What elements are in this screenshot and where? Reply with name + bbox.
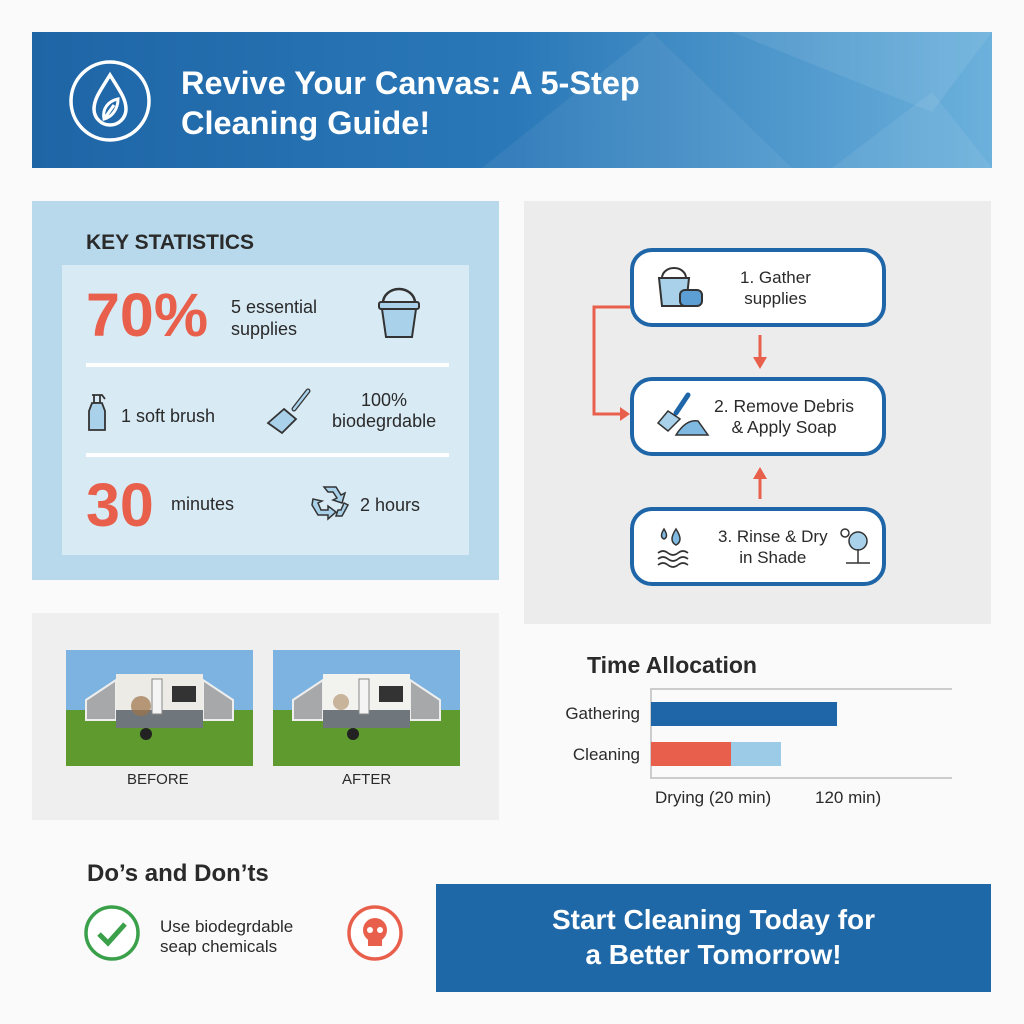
text: 2 hours: 2 hours	[360, 495, 420, 515]
watermark text: cleaningbro.com	[473, 946, 539, 956]
step 2	[630, 377, 886, 456]
text: supplies: 5 essential	[231, 297, 317, 317]
text: supplies: supplies	[231, 319, 297, 339]
text: biodegradable: biodegrdable	[332, 411, 436, 431]
step 2: & Apply Soap	[731, 417, 837, 437]
panel: before and after	[32, 613, 499, 820]
chart: time allocation: Gathering	[565, 704, 640, 723]
step 1: supplies	[744, 289, 807, 308]
stats box	[62, 265, 469, 555]
label before: BEFORE	[127, 771, 189, 788]
icon: spray bottle	[88, 394, 106, 431]
heading: KEY STATISTICS	[86, 231, 254, 254]
stat 70%: 70%	[86, 281, 208, 349]
icon: check	[84, 905, 140, 961]
icon: recycle	[311, 486, 349, 520]
text: minutes: minutes	[171, 494, 234, 514]
text: biodegradable: 100%	[361, 390, 407, 410]
icon: leaf drop	[69, 60, 151, 142]
step 1	[630, 248, 886, 327]
chart: time allocation: 120 min)	[815, 788, 881, 807]
text: do	[160, 917, 293, 956]
title: Revive Your Canvas: A 5-Step	[181, 65, 640, 101]
photo: after	[273, 650, 460, 766]
text: do: seap chemicals	[160, 937, 277, 956]
connector arrows	[592, 306, 767, 499]
chart: time allocation: Drying (20 min)	[655, 788, 771, 807]
photo: before	[66, 650, 253, 766]
chart: time allocation: Time Allocation	[587, 652, 757, 678]
text: soft brush: 1 soft brush	[121, 406, 215, 426]
callout: CTA: a Better Tomorrow!	[585, 939, 842, 970]
icon: skull	[347, 905, 403, 961]
panel: key statistics	[32, 201, 499, 580]
callout: CTA: Start Cleaning Today for	[552, 904, 875, 935]
title: Cleaning Guide!	[181, 105, 430, 141]
text: do: Use biodegrdable	[160, 917, 293, 936]
stat 30: 30	[86, 471, 154, 539]
step 3: in Shade	[739, 548, 806, 567]
icon: bucket	[378, 288, 420, 338]
label after: AFTER	[342, 771, 391, 788]
header banner	[32, 32, 992, 168]
title	[181, 65, 640, 141]
text: supplies	[231, 297, 317, 339]
chart: time allocation: Cleaning	[573, 745, 640, 764]
step 3	[630, 507, 886, 586]
step 1: 1. Gather	[740, 268, 811, 287]
text: biodegradable	[332, 390, 436, 431]
callout: CTA	[436, 884, 991, 992]
heading: dos and donts: Do’s and Don’ts	[87, 860, 269, 887]
icon: paint brush	[266, 388, 310, 434]
chart: time allocation	[565, 652, 952, 807]
step 2: 2. Remove Debris	[714, 396, 854, 416]
step 3: 3. Rinse & Dry	[718, 527, 828, 546]
panel: steps flow	[524, 201, 991, 624]
